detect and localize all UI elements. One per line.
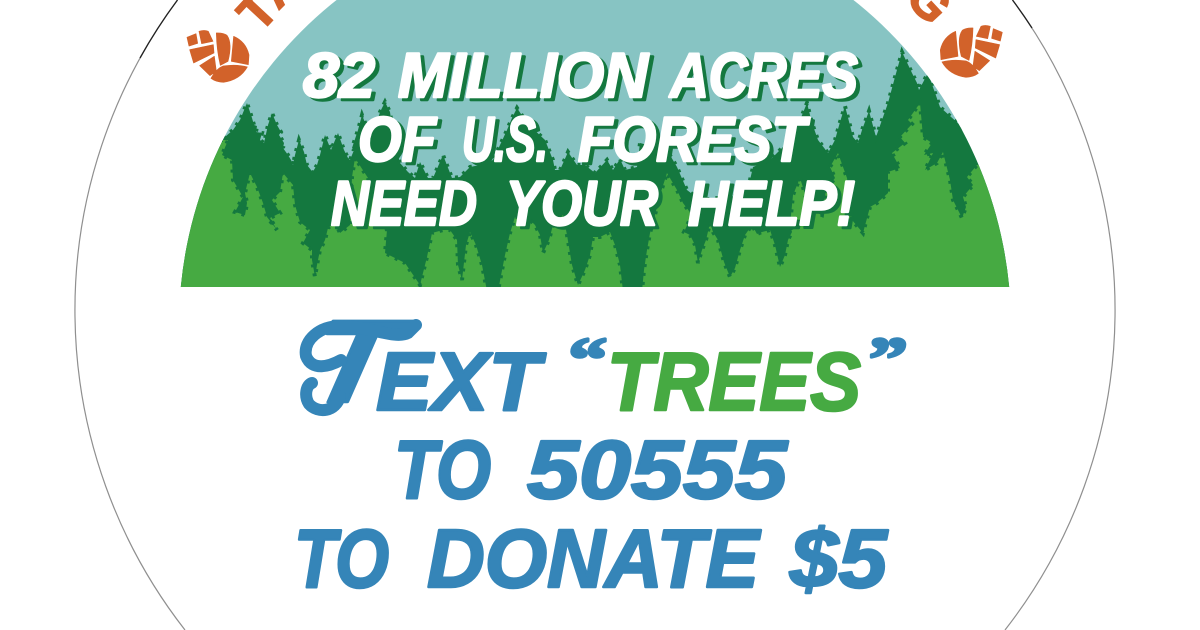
line: to donate $5	[294, 512, 889, 605]
line: to 50555	[394, 423, 789, 516]
line: to 50555: 50555	[527, 423, 789, 516]
heading: forest message: MILLION	[398, 41, 649, 111]
line: to donate $5: $5	[789, 512, 889, 605]
light green ground and trees	[170, 103, 1030, 295]
icon: left pine cone	[187, 30, 249, 82]
sky	[170, 0, 1030, 290]
word: TREES: TREES	[607, 335, 861, 428]
dark green tree line	[170, 52, 1030, 290]
line: to donate $5: TO	[294, 512, 389, 605]
heading: forest message: YOUR	[506, 169, 658, 239]
opening quote: “	[564, 326, 606, 394]
call to action text	[294, 296, 906, 605]
script capital T with swashes: T	[298, 296, 420, 428]
heading: forest message: 82	[303, 41, 375, 111]
heading: forest message: U.S.	[462, 105, 548, 175]
line: to 50555: TO	[394, 423, 491, 516]
closing quote: ”	[864, 326, 906, 394]
heading: forest message: HELP!	[688, 169, 855, 239]
line: to donate $5: DONATE	[427, 512, 762, 605]
word: EXT: EXT	[376, 335, 546, 428]
heading: forest message: ACRES	[668, 41, 858, 111]
heading: forest message: NEED	[331, 169, 477, 239]
heading: forest message: FOREST	[578, 105, 810, 175]
icon: right pine cone	[940, 25, 1002, 77]
forest dome scene	[170, 0, 1030, 295]
heading: forest message	[303, 41, 858, 239]
heading: forest message: OF	[358, 105, 437, 175]
tagline letters on arc	[227, 0, 963, 42]
